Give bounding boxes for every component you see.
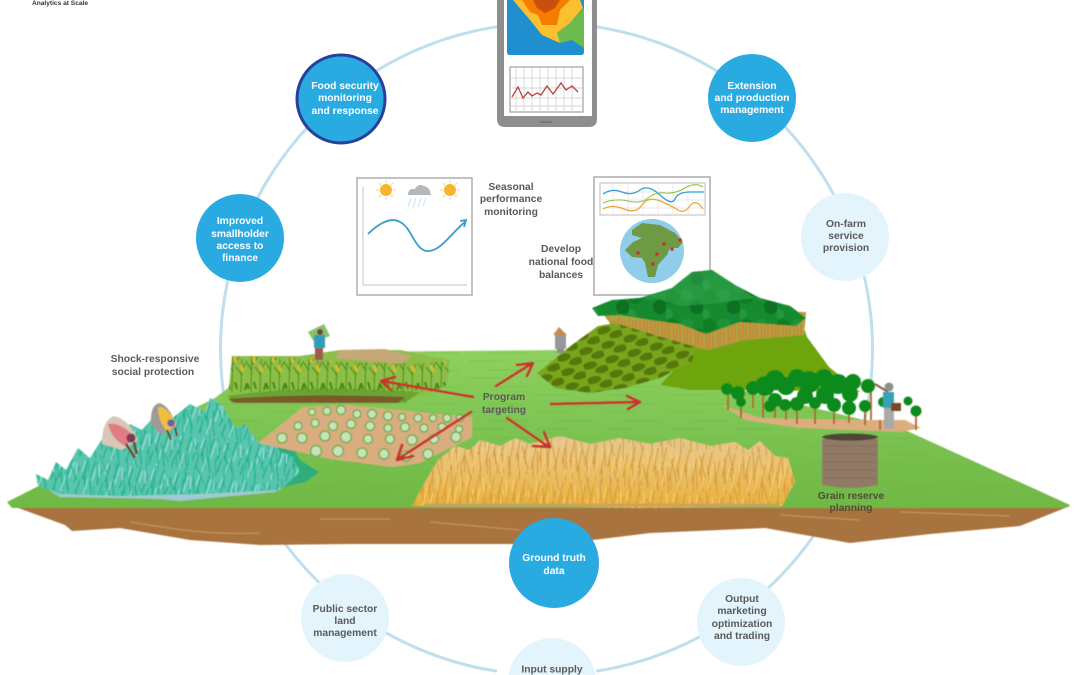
corn field — [228, 349, 450, 403]
hillside — [600, 312, 860, 392]
farmer: standing with load — [308, 324, 330, 360]
services ring — [221, 23, 872, 671]
orchard soil — [722, 405, 921, 432]
node: public sector: land — [334, 616, 356, 627]
tablet with map and chart — [497, 0, 597, 127]
soil layer — [10, 498, 1070, 545]
green land surface — [7, 350, 1070, 508]
grain reserve label: Grain reserve — [818, 491, 884, 502]
panel: national food balance chart and globe — [594, 177, 710, 295]
node: output marketing — [697, 578, 785, 666]
node: output marketing: Output — [725, 594, 759, 605]
orchard trees — [721, 369, 922, 430]
farmer: orchard picker — [875, 382, 901, 429]
national food balances label: balances — [539, 270, 583, 281]
panel: seasonal performance chart — [357, 178, 472, 295]
icon: rain cloud — [408, 185, 431, 208]
icon: sun left — [376, 180, 396, 200]
wheat field — [412, 436, 795, 508]
seasonal performance label: monitoring — [484, 207, 538, 218]
node: improved finance: finance — [222, 253, 258, 264]
seasonal performance label: performance — [480, 194, 542, 205]
node: ground truth — [509, 518, 599, 608]
node: improved finance: Improved — [217, 216, 263, 227]
grain reserve label — [818, 491, 884, 514]
seasonal performance label — [480, 182, 542, 218]
cabbage field — [258, 405, 472, 467]
node: on-farm — [801, 193, 889, 281]
node: improved finance: smallholder — [211, 229, 269, 240]
line chart — [510, 67, 583, 112]
logo tagline: Analytics at Scale — [32, 0, 88, 7]
node: extension: and production — [715, 93, 789, 104]
icon: sun right — [440, 180, 460, 200]
node: extension: Extension — [727, 81, 777, 92]
forest trunks — [600, 310, 806, 350]
program targeting label: Program — [483, 392, 525, 403]
node: extension: management — [720, 105, 784, 116]
shock-responsive label — [111, 354, 200, 378]
node: public sector — [301, 574, 389, 662]
node: on-farm: service — [828, 231, 864, 242]
trend curve arrow — [368, 220, 466, 251]
node: output marketing: and trading — [714, 631, 770, 642]
node: food security: and response — [312, 106, 379, 117]
map — [507, 0, 584, 55]
node: on-farm: On-farm — [826, 219, 866, 230]
national food balances label: Develop — [541, 244, 581, 255]
node: extension — [708, 54, 796, 142]
node: on-farm: provision — [823, 243, 869, 254]
program targeting label: targeting — [482, 405, 526, 416]
globe — [620, 219, 684, 283]
node: ground truth: Ground truth — [522, 553, 586, 564]
node: output marketing: marketing — [717, 606, 767, 617]
node: output marketing: optimization — [712, 619, 772, 630]
node: food security: monitoring — [318, 93, 372, 104]
landscape illustration — [7, 270, 1070, 545]
farmer: straw hat — [553, 327, 567, 353]
shock-responsive label: Shock-responsive — [111, 354, 200, 365]
node: improved finance — [196, 194, 284, 282]
multi-line chart — [600, 183, 705, 215]
red targeting arrows — [381, 363, 640, 460]
program targeting label — [482, 392, 526, 416]
national food balances label: national food — [529, 257, 593, 268]
grain reserve label: planning — [830, 503, 872, 514]
node: food security: Food security — [311, 81, 379, 92]
forest canopy — [592, 270, 806, 334]
soybean field — [537, 323, 696, 393]
seasonal performance label: Seasonal — [488, 182, 534, 193]
node: ground truth: data — [543, 566, 565, 577]
node: improved finance: access to — [217, 241, 263, 252]
grain reserve bin — [822, 433, 878, 488]
node: public sector: management — [313, 628, 377, 639]
rice paddy with water — [36, 398, 319, 501]
node: food security — [297, 55, 385, 143]
node: public sector: Public sector — [313, 604, 377, 615]
farmer: bending pink — [102, 416, 138, 458]
farmer: bending yellow — [151, 403, 177, 440]
national food balances label — [529, 244, 593, 281]
node: input supply — [509, 638, 595, 675]
shock-responsive label: social protection — [112, 367, 194, 378]
